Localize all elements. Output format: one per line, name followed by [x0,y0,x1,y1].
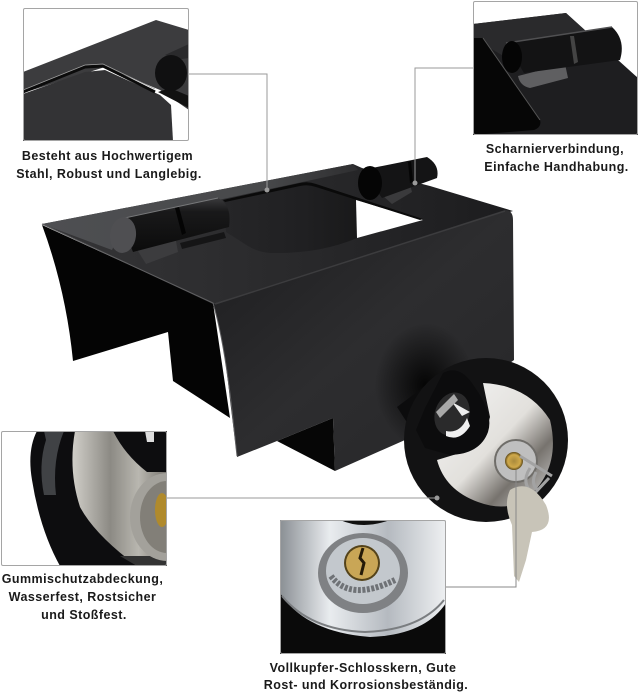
disc padlock with keys [397,358,568,582]
well lip [223,182,423,220]
caption: rubber cover [2,572,163,622]
fold highlight [215,211,505,304]
core rim [495,440,537,482]
key ring [520,456,552,494]
product: black steel hitch lock box [42,157,514,471]
brass cylinder [505,452,523,470]
caption: rubber cover: und Stoßfest. [41,608,127,622]
shadow of the lock on the panel [375,323,475,447]
keys [507,486,549,582]
inset: lock core close-up [280,520,446,654]
front panel [213,210,514,471]
lower tunnel under the front panel [277,418,335,471]
caption: steel: Besteht aus Hochwertigem [22,149,193,163]
caption: hinge: Einfache Handhabung. [484,160,629,174]
caption: rubber cover: Gummischutzabdeckung, [2,572,163,586]
caption: steel [16,149,202,181]
caption: steel: Stahl, Robust und Langlebig. [16,167,202,181]
caption: lock core: Rost- und Korrosionsbeständig. [264,678,468,692]
caption: hinge [484,142,629,174]
lock core [495,440,537,482]
leader line: steel [189,74,270,192]
top plate rear band [42,164,358,250]
top plate [42,164,513,304]
leader line: lock core [446,470,516,587]
caption: lock core [264,661,468,692]
hinge left [108,198,230,264]
leader line: hinge [412,68,473,186]
white gap in shackle top [452,402,470,416]
caption: lock core: Vollkupfer-Schlosskern, Gute [270,661,456,675]
white gap in shackle [446,418,470,438]
inset: hinge close-up [473,1,638,135]
hinge right [358,157,438,204]
caption: hinge: Scharnierverbindung, [486,142,624,156]
box inner left wall [42,225,230,418]
caption: rubber cover: Wasserfest, Rostsicher [9,590,156,604]
inset: rubber cover close-up [1,431,167,566]
rubber cover [404,358,568,522]
shackle opening [429,388,475,440]
steel disc [437,383,553,507]
black shackle shroud [416,370,489,455]
white opening seen through the plate [356,200,423,238]
steel mounting bracket [397,380,466,444]
leader line: rubber [167,496,440,500]
inset: steel plate close-up [23,8,189,141]
shackle label [436,394,458,418]
plate edge highlight [42,224,237,456]
square cut-out well [223,182,357,253]
